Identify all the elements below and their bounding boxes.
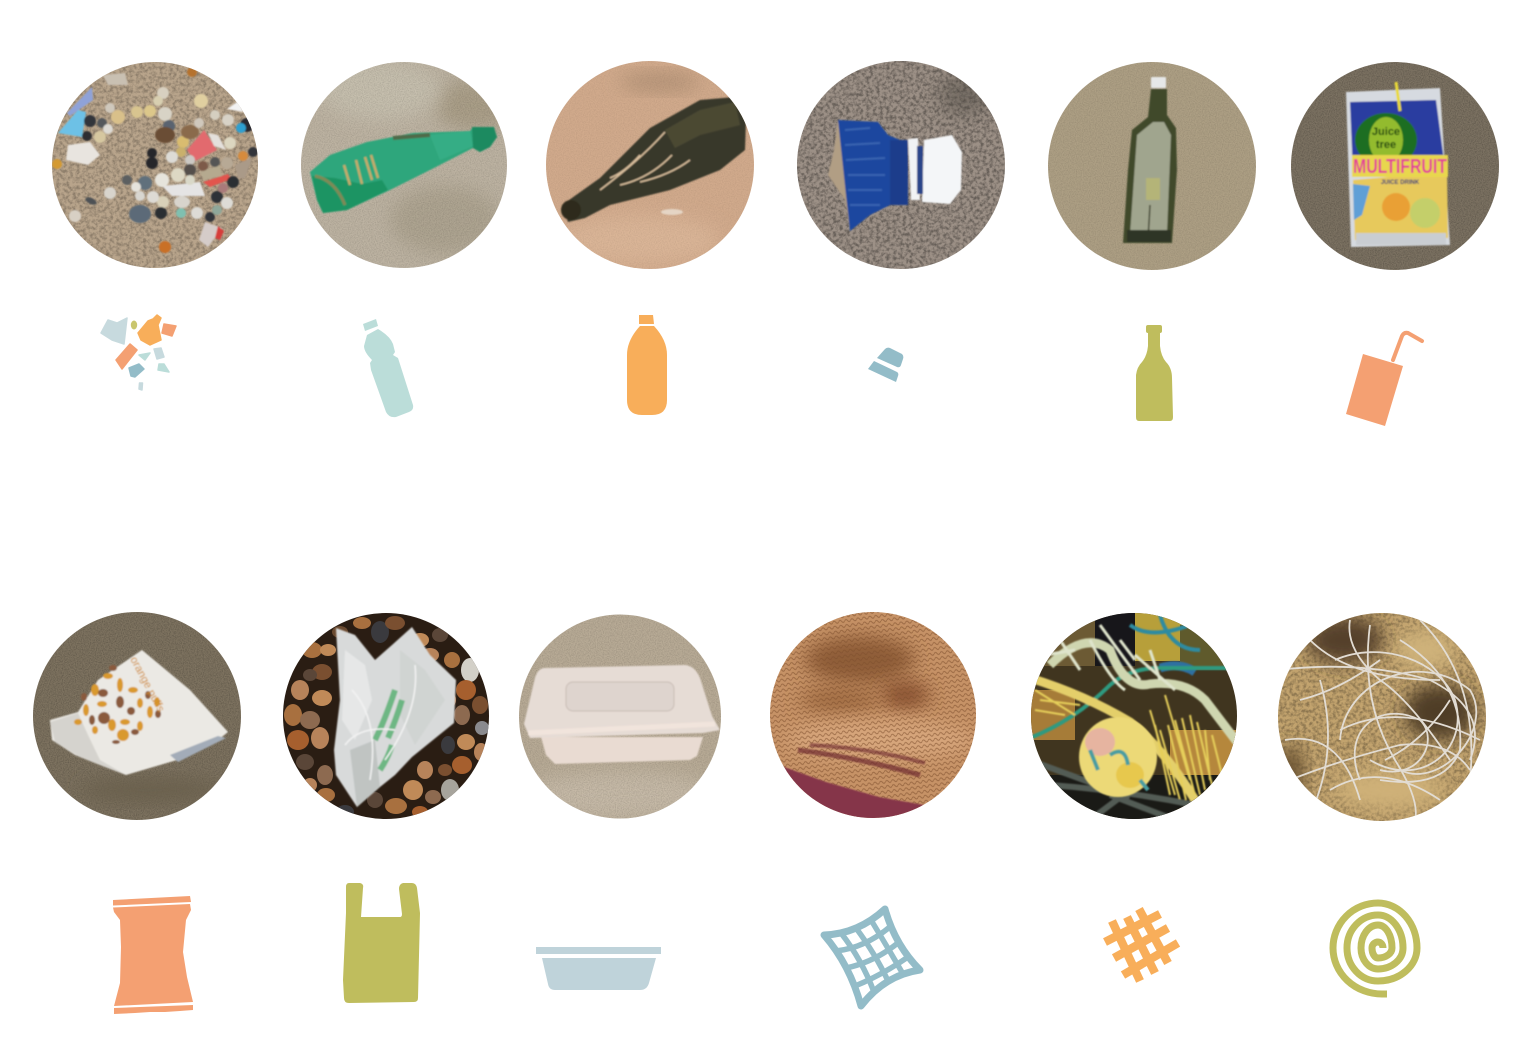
icon: fishing net	[824, 909, 920, 1006]
photo: Juice Tree multifruit pouch on sand: Juice	[1372, 126, 1400, 138]
photo: crumpled white orange puffs packet on sand: orange puffs	[127, 655, 167, 715]
photo: tangled frayed colourful rope	[1029, 611, 1240, 821]
photo: blue and white bottle caps on gritty sand	[795, 59, 1007, 271]
photo: orange fishing net with burgundy edge	[768, 610, 978, 825]
icon: orange milk bottle	[627, 315, 667, 415]
photo: plastic pellets and fragments on sand	[50, 60, 262, 272]
icon: coiled fishing line spiral	[1333, 903, 1417, 994]
photo: Juice Tree multifruit pouch on sand: JUICE DRINK	[1381, 180, 1420, 186]
photo: Juice Tree multifruit pouch on sand: MULTIFRUIT	[1353, 156, 1447, 178]
photo: translucent plastic food container on sand	[517, 613, 723, 821]
icon: plastic carrier bag	[343, 883, 420, 1003]
icon: glass bottle	[1136, 325, 1173, 421]
photo: Juice Tree multifruit pouch on sand	[1289, 60, 1501, 272]
icon: rope mesh	[1105, 909, 1178, 981]
photo: green glass bottle on sand	[1046, 60, 1258, 272]
photo: tangled white fishing line on sand	[1276, 611, 1488, 823]
icon: plastic tub with lid	[536, 947, 661, 990]
icon: plastic drink bottle	[363, 319, 413, 417]
icon: plastic fragments	[101, 315, 176, 390]
icon: crisp packet	[113, 896, 193, 1014]
photo: dark glass bottle on orange sand	[544, 59, 756, 271]
photo: Juice Tree multifruit pouch on sand: tree	[1376, 139, 1396, 151]
icon: bottle cap	[868, 348, 903, 382]
photo: clear plastic carrier bag on dark pebbles	[281, 611, 493, 823]
photo: crumpled white orange puffs packet on sand	[31, 610, 243, 822]
icon: juice carton with straw	[1346, 333, 1422, 426]
photo: crushed green plastic bottle on sand	[298, 60, 515, 272]
